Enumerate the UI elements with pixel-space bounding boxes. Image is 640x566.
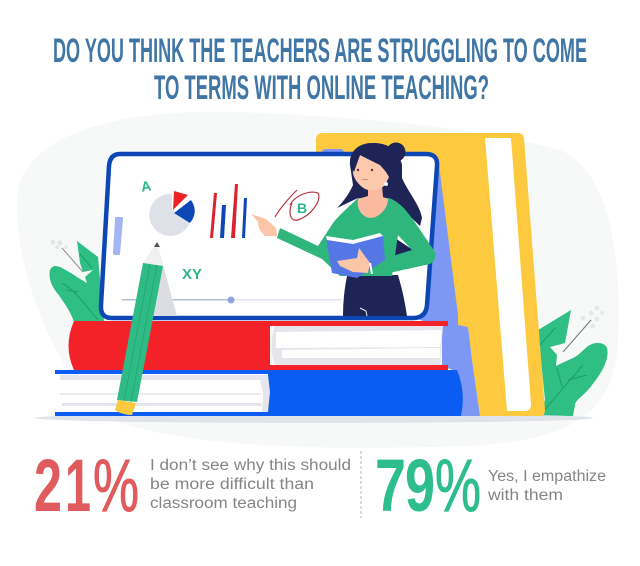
blue book [55,370,463,416]
tablet screen [101,154,437,318]
periwinkle book spine [322,149,480,416]
open book [326,233,385,278]
sleeve cuff [369,263,373,274]
pie chart [149,191,195,236]
hair back [337,143,422,226]
stat: 21%: % [93,444,139,527]
bar chart [210,184,247,238]
letter XY: XY [182,266,202,283]
shirt body and pointing arm [277,198,398,276]
right leaves [538,306,608,416]
stat text: 21% [150,457,351,512]
letter B with scribble: B [297,200,307,216]
stat: 79%: 9 [405,444,435,527]
stat: 21%: 1 [65,444,91,527]
ground shadow [35,413,593,423]
right sleeve [370,203,435,276]
hair fringe [350,143,402,178]
face features [357,169,373,180]
stat text: 21%: I don’t see why this should [150,457,351,474]
neck and chest [358,186,388,218]
illustration [35,133,608,423]
stat: 79%: % [435,444,481,527]
stat text: 21%: be more difficult than [150,476,314,493]
stat: 79%: 7 [375,444,406,527]
left leaves [49,240,104,322]
divider [360,451,362,518]
screen scroll pill [113,217,123,255]
earring [384,182,388,186]
letter A: A [140,178,152,195]
stat text: 21%: classroom teaching [150,495,297,512]
red book pages [272,326,443,365]
stat text: 79% [487,468,606,504]
stat: 21% [34,444,351,527]
teacher [251,142,435,316]
skirt fold [360,308,367,316]
background blob [17,112,619,448]
hair bun [386,142,406,162]
letter B with scribble [275,190,319,220]
red book [68,321,448,370]
pointing hand [251,214,277,236]
progress slider [122,296,342,304]
pencil [115,242,177,415]
hand on book [337,248,370,273]
stat: 21%: 2 [34,444,62,527]
blue book pages [55,374,270,412]
title [53,32,587,107]
stat text: 79%: with them [487,487,563,504]
yellow standing book [316,133,545,416]
stat text: 79%: Yes, I empathize [488,468,606,485]
hair behind arm [395,238,413,256]
skirt [343,275,407,316]
face [353,155,389,191]
stat: 79% [375,444,606,527]
